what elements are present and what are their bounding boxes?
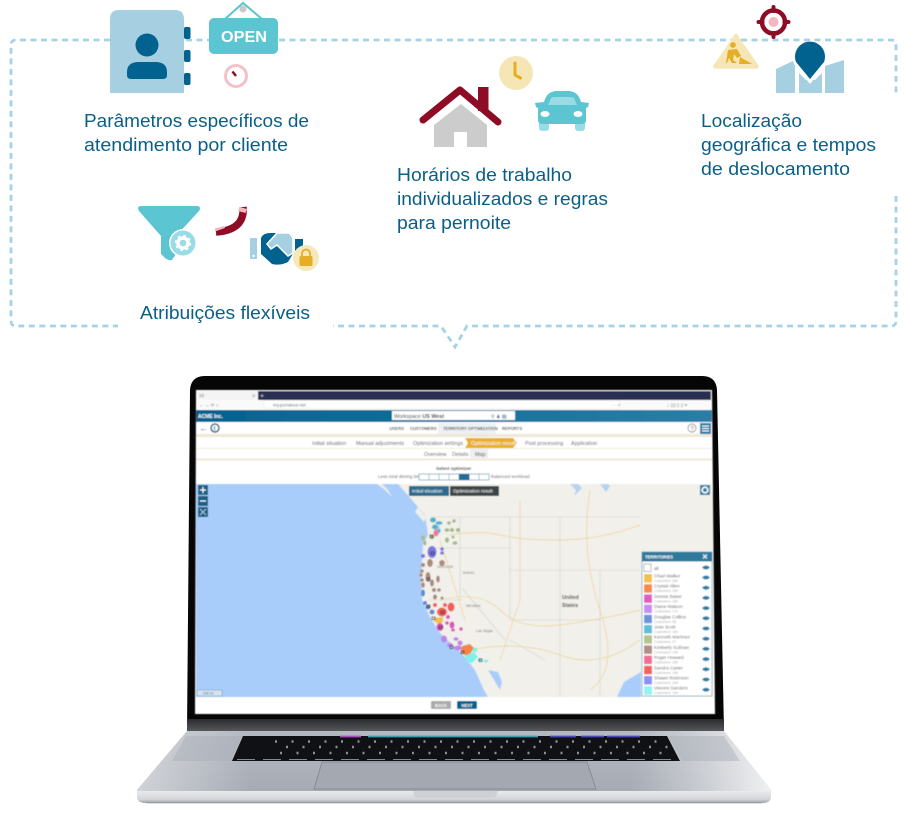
territory list rows: Kimberly Sullivan — [654, 645, 690, 650]
panel: atribuições flexíveis — [138, 206, 319, 323]
back button: BACK — [435, 703, 447, 708]
text: localização — [701, 111, 876, 179]
territory list rows: Customers: 189 — [654, 599, 678, 603]
territory list rows: Customers: 145 — [654, 650, 678, 654]
territory list rows: Jose Scott — [654, 624, 676, 630]
text: horários de trabalho: para pernoite — [397, 213, 511, 233]
map mode buttons: Optimization result — [453, 488, 493, 494]
browser address bar: my.portatour.net — [273, 402, 307, 408]
territory list rows: Customers: 265 — [654, 589, 678, 593]
icon: clock — [499, 56, 533, 90]
territory list rows: Customers: 97 — [654, 640, 676, 644]
hinge strip — [187, 719, 724, 731]
map: United — [562, 595, 579, 601]
laptop — [137, 376, 771, 803]
browser tab bar: × — [252, 394, 256, 400]
icon: timer — [226, 66, 246, 86]
browser address bar: ↓ ▯▯ ▯ ▯ ≡ — [667, 402, 688, 408]
back button — [431, 701, 451, 709]
icon: telephone — [215, 207, 247, 232]
optimisation steps: Manual adjustments — [356, 441, 405, 447]
nav bar: ? — [690, 426, 694, 432]
app header: ACME Inc. — [198, 414, 223, 420]
nav bar: TERRITORY OPTIMIZATION — [443, 426, 498, 431]
map: OREGON — [437, 565, 453, 569]
icon: handshake with lock — [250, 233, 319, 271]
keyboard — [232, 736, 680, 761]
optimisation steps: Optimization settings — [413, 441, 463, 447]
trackpad — [314, 762, 596, 789]
text: parâmetros específicos: Parâmetros específicos de — [84, 111, 309, 131]
territory list rows: Dennis Baker — [654, 594, 682, 599]
text: horários de trabalho — [397, 165, 608, 233]
text: localização: geográfica e tempos — [701, 135, 876, 155]
browser tab bar: + — [260, 393, 264, 400]
browser address bar: ··· ☆ — [611, 402, 622, 408]
panel: horários de trabalho — [397, 56, 608, 233]
app header: Workspace US West — [394, 414, 444, 420]
optimisation steps: Optimization result — [471, 441, 516, 447]
territory list rows: Roger Howard — [654, 655, 684, 660]
optimisation steps — [196, 434, 712, 449]
screen — [195, 390, 715, 714]
text: horários de trabalho: individualizados e regras — [397, 189, 608, 209]
territory list rows: Kenneth Martinez — [654, 635, 691, 640]
territory list rows: Crystal Allen — [654, 584, 680, 589]
text: horários de trabalho: Horários de trabalho — [397, 165, 572, 185]
nav bar — [196, 422, 712, 434]
browser address bar: ← → ⟳ ⌂ — [199, 402, 219, 408]
laptop base deck — [137, 731, 771, 791]
browser tab bar: 10 — [199, 393, 205, 398]
nav bar: ← — [199, 423, 208, 433]
territory list rows: Customers: 185 — [654, 671, 678, 675]
text: atribuições flexíveis: Atribuições flexíveis — [140, 303, 310, 323]
panel: parâmetros por cliente — [84, 3, 309, 155]
select optimizer slider: Balanced workload — [491, 474, 530, 479]
sub tabs — [196, 449, 712, 460]
map mode buttons: Initial situation — [412, 488, 443, 494]
icon: car — [535, 91, 589, 131]
territory list rows: Customers: 180 — [654, 661, 678, 665]
sub tabs: Map — [475, 452, 486, 458]
nav bar: t — [214, 426, 216, 432]
select optimizer slider: Select optimizer — [436, 466, 471, 471]
browser tab bar — [197, 391, 711, 400]
map scale: 200 mi — [203, 692, 214, 696]
nav bar: USERS — [390, 426, 404, 431]
sub tabs: Details — [452, 452, 469, 458]
icon: map pin — [776, 41, 844, 93]
territories panel — [642, 552, 712, 696]
icon: target — [758, 7, 788, 37]
optimisation steps: Application — [571, 441, 597, 447]
territory list rows: Customers: 345 — [654, 681, 678, 685]
map scale — [197, 690, 222, 696]
icon: house — [423, 87, 498, 147]
front lip — [137, 791, 771, 803]
territories panel: TERRITORIES — [645, 554, 673, 560]
text: localização: de deslocamento — [701, 159, 850, 179]
territory list rows: Customers: 144 — [654, 691, 678, 695]
icon: open sign: OPEN — [221, 29, 267, 46]
icon: open sign — [209, 3, 278, 54]
territory list rows: Customers: 98 — [654, 620, 676, 624]
optimisation steps: Post processing — [525, 441, 563, 447]
territory list rows: Vincent Sanders — [654, 686, 688, 691]
territory list rows: Sandra Carter — [654, 665, 683, 670]
map: Las Vegas — [476, 629, 493, 633]
nav bar: REPORTS — [502, 426, 522, 431]
optimisation steps: Initial situation — [312, 441, 346, 447]
select optimizer slider — [378, 466, 530, 480]
nav bar: CUSTOMERS — [410, 426, 437, 431]
next button — [457, 701, 477, 709]
map settings gear — [700, 485, 710, 495]
territory list rows: Customers: 280 — [654, 579, 678, 583]
panel: localização geográfica — [701, 7, 876, 179]
map — [196, 484, 713, 697]
select optimizer slider: Less total driving time — [378, 474, 423, 479]
laptop lid — [187, 376, 724, 731]
text: localização: Localização — [701, 111, 802, 131]
text: parâmetros específicos — [84, 111, 309, 155]
icon: funnel with gear — [138, 206, 200, 260]
territory list rows: Customers: 160 — [654, 630, 678, 634]
territory list rows: Diana Watson — [654, 604, 683, 609]
map zoom controls — [198, 485, 208, 517]
territory list rows: Customers: 170 — [654, 610, 678, 614]
icon: roadworks sign — [714, 34, 758, 68]
territory list rows: Chad Walker — [654, 574, 681, 578]
sub tabs: Overview — [424, 452, 447, 458]
next button: NEXT — [461, 703, 473, 708]
text: parâmetros específicos: atendimento por cliente — [84, 135, 288, 155]
territory list rows — [644, 574, 710, 695]
map: IDAHO — [463, 571, 475, 575]
dashed callout frame — [11, 40, 896, 347]
map: States — [562, 603, 578, 609]
territories panel: all — [654, 566, 659, 571]
icon: address book — [110, 10, 190, 93]
map: NEVADA — [466, 604, 481, 608]
browser address bar — [197, 400, 711, 409]
territory markers — [419, 518, 488, 663]
territory list rows: Douglas Collins — [654, 614, 687, 619]
map mode buttons — [409, 486, 499, 496]
app header: ⚲ ♟ ▤ — [491, 414, 507, 420]
app header — [196, 410, 712, 422]
territory list rows: Shawn Robinson — [654, 676, 689, 680]
